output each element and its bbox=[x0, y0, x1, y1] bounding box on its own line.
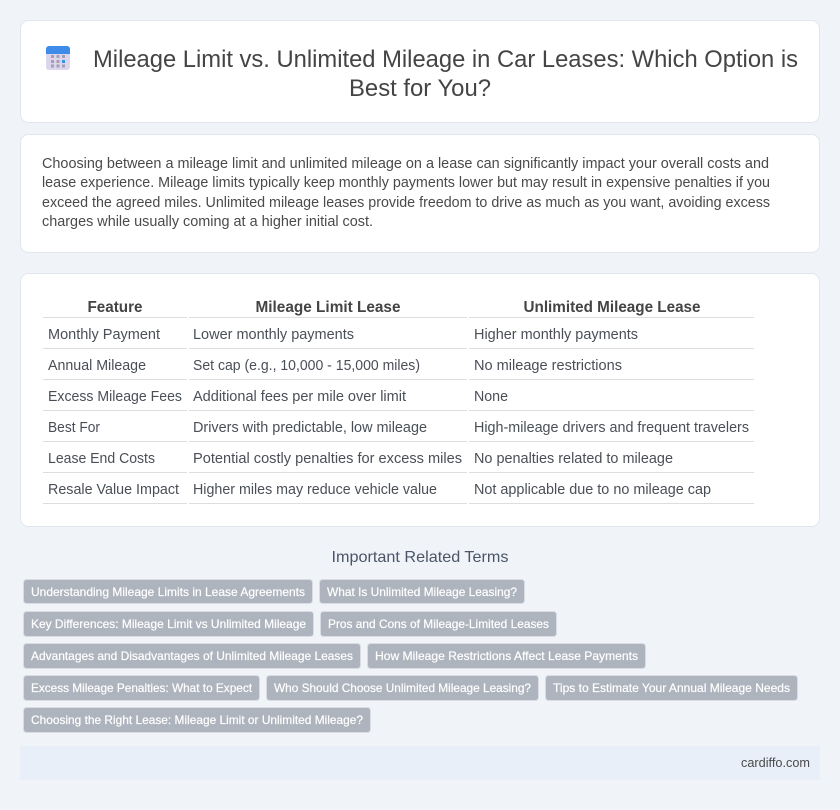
text block: introduction: Choosing between a mileage limit and unlimited mileage on a lease can significantly impact your overall costs and bbox=[42, 156, 769, 172]
table row: best for: Drivers with predictable, low mileage bbox=[193, 420, 427, 436]
icon: calendar bbox=[46, 46, 70, 70]
table row: resale value impact: Not applicable due to no mileage cap bbox=[474, 482, 711, 498]
chip: What Is Unlimited Mileage Leasing? bbox=[327, 585, 517, 599]
text block: introduction: exceed the agreed miles. Unlimited mileage leases provide freedom to drive as much as you want, avoiding excess bbox=[42, 195, 770, 211]
table row: best for: High-mileage drivers and frequent travelers bbox=[474, 420, 749, 436]
table row: monthly payment bbox=[48, 327, 638, 343]
panel: title card bbox=[20, 20, 820, 122]
title: Best for You? bbox=[349, 75, 491, 102]
heading: important related terms: Important Related Terms bbox=[332, 549, 508, 566]
table row: monthly payment: Monthly Payment bbox=[48, 327, 160, 343]
table row: resale value impact: Higher miles may reduce vehicle value bbox=[193, 482, 437, 498]
table row: resale value impact: Resale Value Impact bbox=[48, 482, 179, 498]
table row: annual mileage bbox=[48, 358, 622, 374]
panel: comparison table bbox=[20, 274, 820, 526]
chip bbox=[320, 580, 524, 604]
table row: lease end costs bbox=[48, 451, 673, 467]
table header bbox=[88, 299, 701, 316]
table row: lease end costs: No penalties related to mileage bbox=[474, 451, 673, 467]
chip: Who Should Choose Unlimited Mileage Leasing? bbox=[274, 681, 531, 695]
table row: annual mileage: Annual Mileage bbox=[48, 358, 146, 374]
text block: introduction: lease experience. Mileage limits typically keep monthly payments lower but may result in expensive penalties if you bbox=[42, 175, 770, 191]
table row: lease end costs: Lease End Costs bbox=[48, 451, 155, 467]
footer: cardiffo.com bbox=[741, 756, 810, 770]
table row: excess mileage fees bbox=[48, 389, 508, 405]
chip bbox=[24, 644, 360, 668]
chip: Key Differences: Mileage Limit vs Unlimited Mileage bbox=[31, 617, 306, 631]
chip: Understanding Mileage Limits in Lease Agreements bbox=[31, 585, 305, 599]
table row: annual mileage: No mileage restrictions bbox=[474, 358, 622, 374]
table row: excess mileage fees: Additional fees per mile over limit bbox=[193, 389, 406, 405]
table row: best for: Best For bbox=[48, 420, 100, 436]
chip bbox=[24, 676, 260, 700]
table row: lease end costs: Potential costly penalties for excess miles bbox=[193, 451, 462, 467]
related terms chips bbox=[24, 580, 798, 732]
text block: introduction bbox=[42, 156, 770, 230]
chip bbox=[24, 580, 312, 604]
table row: monthly payment: Lower monthly payments bbox=[193, 327, 354, 343]
chip: Tips to Estimate Your Annual Mileage Needs bbox=[553, 681, 790, 695]
chip bbox=[546, 676, 798, 700]
chip: How Mileage Restrictions Affect Lease Payments bbox=[375, 649, 638, 663]
table header: Feature bbox=[88, 299, 143, 316]
chip: Advantages and Disadvantages of Unlimited Mileage Leases bbox=[31, 649, 353, 663]
chip bbox=[266, 676, 538, 700]
footer bbox=[20, 746, 820, 780]
table header: Mileage Limit Lease bbox=[256, 299, 401, 316]
text block: introduction: charges while usually coming at a higher initial cost. bbox=[42, 214, 373, 230]
chip bbox=[24, 708, 370, 732]
chip bbox=[24, 612, 314, 636]
table row: excess mileage fees: None bbox=[474, 389, 508, 405]
table header: Unlimited Mileage Lease bbox=[524, 299, 701, 316]
table row: resale value impact bbox=[48, 482, 711, 498]
table row: annual mileage: Set cap (e.g., 10,000 - 15,000 miles) bbox=[193, 358, 420, 374]
title bbox=[93, 46, 798, 102]
panel: introduction bbox=[20, 134, 820, 252]
chip bbox=[368, 644, 646, 668]
chip: Pros and Cons of Mileage-Limited Leases bbox=[328, 617, 549, 631]
chip bbox=[320, 612, 556, 636]
table row: best for bbox=[48, 420, 749, 436]
table row: excess mileage fees: Excess Mileage Fees bbox=[48, 389, 182, 405]
title: Mileage Limit vs. Unlimited Mileage in Car Leases: Which Option is bbox=[93, 46, 798, 73]
chip: Excess Mileage Penalties: What to Expect bbox=[31, 681, 253, 695]
chip: Choosing the Right Lease: Mileage Limit or Unlimited Mileage? bbox=[31, 713, 363, 727]
table row: monthly payment: Higher monthly payments bbox=[474, 327, 638, 343]
